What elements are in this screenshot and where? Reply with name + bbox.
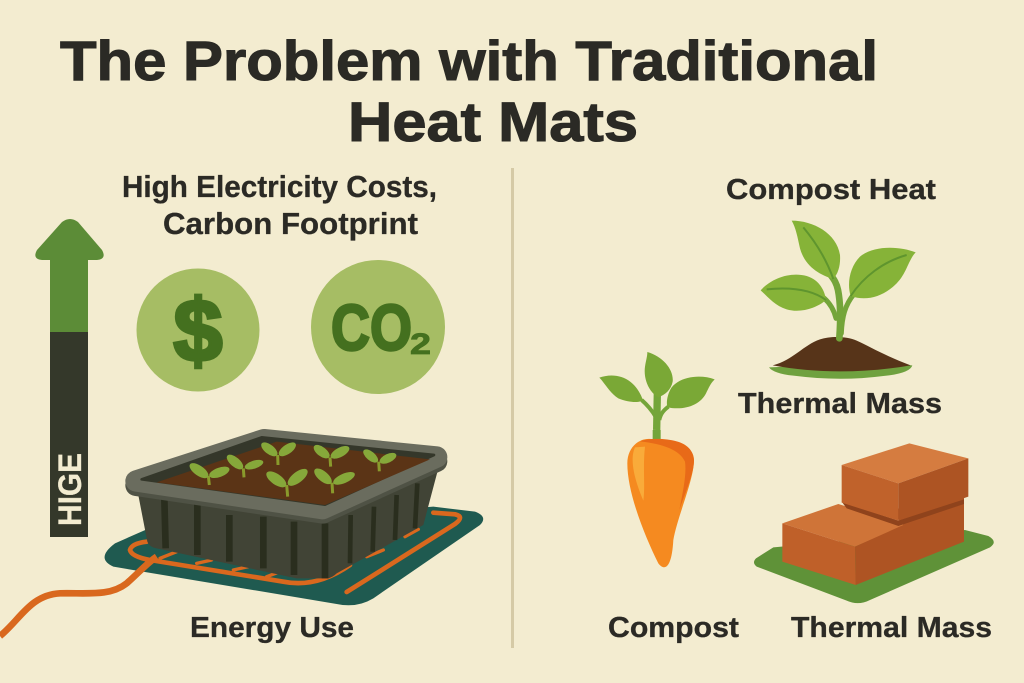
label: thermal mass lower: Thermal Mass — [791, 612, 992, 644]
heading: high electricity costs — [122, 169, 437, 241]
carrot leaves — [599, 352, 715, 430]
icon: carrot — [599, 352, 715, 567]
tray body — [137, 468, 438, 578]
heating coil — [130, 513, 460, 592]
label: energy use: Energy Use — [190, 612, 354, 644]
icon: dollar coin — [136, 268, 260, 392]
icon: rising energy arrow — [35, 219, 104, 537]
icon: CO2 circle: 2 — [410, 328, 431, 361]
icon: CO2 circle — [311, 260, 445, 394]
heading: compost heat: Compost Heat — [726, 174, 936, 206]
title: The Problem with Traditional — [60, 29, 878, 92]
tray rim — [136, 444, 437, 513]
label: compost: Compost — [608, 612, 739, 644]
heading: high electricity costs: High Electricity Costs, — [122, 169, 437, 204]
icon: stacked bricks on green mat — [754, 443, 994, 603]
heat mat — [105, 507, 483, 605]
seedlings — [187, 440, 398, 497]
label: thermal mass upper: Thermal Mass — [738, 388, 942, 420]
carrot body — [627, 430, 694, 567]
icon: CO2 circle: CO — [331, 291, 412, 364]
power cord — [0, 557, 157, 636]
soil — [157, 442, 430, 505]
icon: seedling in soil — [761, 221, 916, 379]
icon: rising energy arrow: HIGE — [52, 453, 88, 526]
panel: traditional heat mat problems — [0, 169, 483, 644]
icon: dollar coin: $ — [174, 281, 222, 380]
title: Heat Mats — [348, 90, 638, 153]
tray ribs — [164, 483, 417, 578]
panel: compost and thermal mass alternatives — [599, 174, 994, 644]
illustration: seed tray on heat mat — [0, 437, 483, 636]
title — [60, 29, 878, 153]
heading: high electricity costs: Carbon Footprint — [163, 206, 418, 241]
